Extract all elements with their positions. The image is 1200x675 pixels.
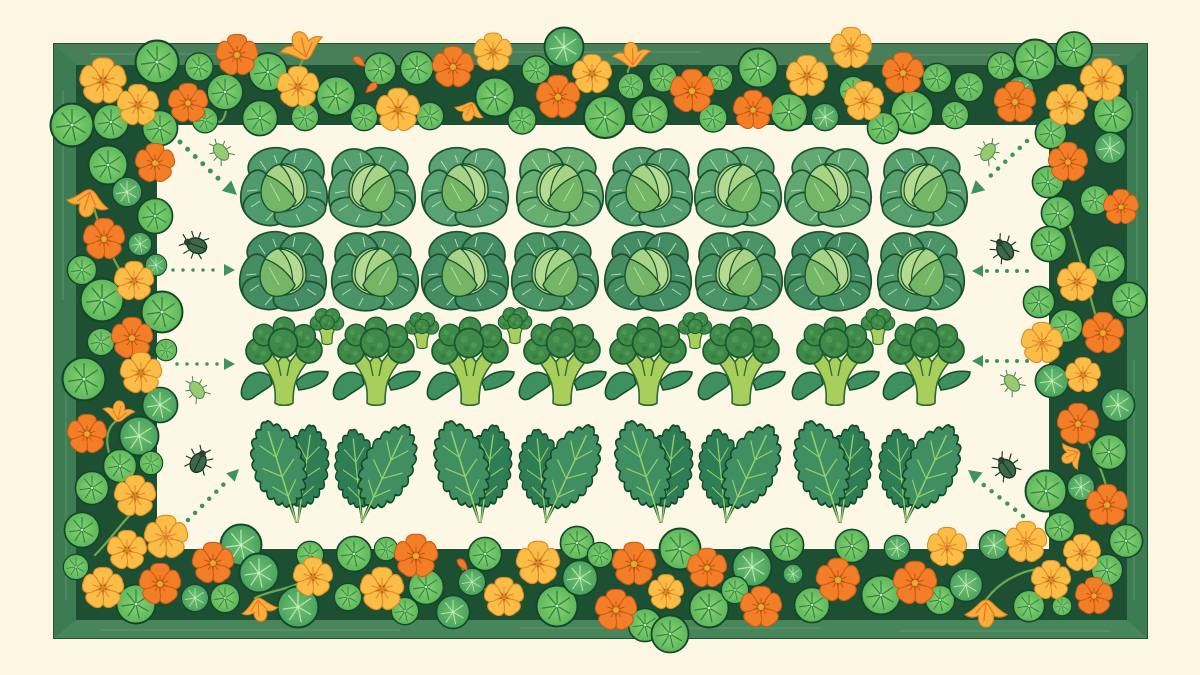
- nasturtium flowers: top border: [78, 25, 1126, 183]
- small broccoli seedlings: [310, 308, 895, 348]
- broccoli row: [241, 317, 970, 405]
- nasturtium stems: [90, 55, 1116, 600]
- nasturtium leaves: left border: [51, 104, 182, 580]
- kale row: [240, 414, 974, 533]
- nasturtium flowers: left border: [64, 143, 236, 610]
- nasturtium flowers: bottom border: [240, 521, 1114, 632]
- dark soil border: [76, 65, 1127, 620]
- cabbage row 2: [237, 228, 967, 315]
- dotted arrows: right side: [964, 141, 1027, 516]
- nasturtium leaves: right border: [1023, 166, 1147, 586]
- nasturtium leaves: bottom border: [116, 525, 1072, 653]
- nasturtium leaves: top border: [136, 28, 1133, 164]
- cream growing area: [157, 125, 1049, 549]
- cabbage row 1: [238, 144, 970, 231]
- insects: aphids and beetles: [176, 134, 1027, 485]
- dotted arrows: pests repelled toward crops, left side: [173, 142, 243, 520]
- nasturtium flowers: right border: [1019, 189, 1140, 527]
